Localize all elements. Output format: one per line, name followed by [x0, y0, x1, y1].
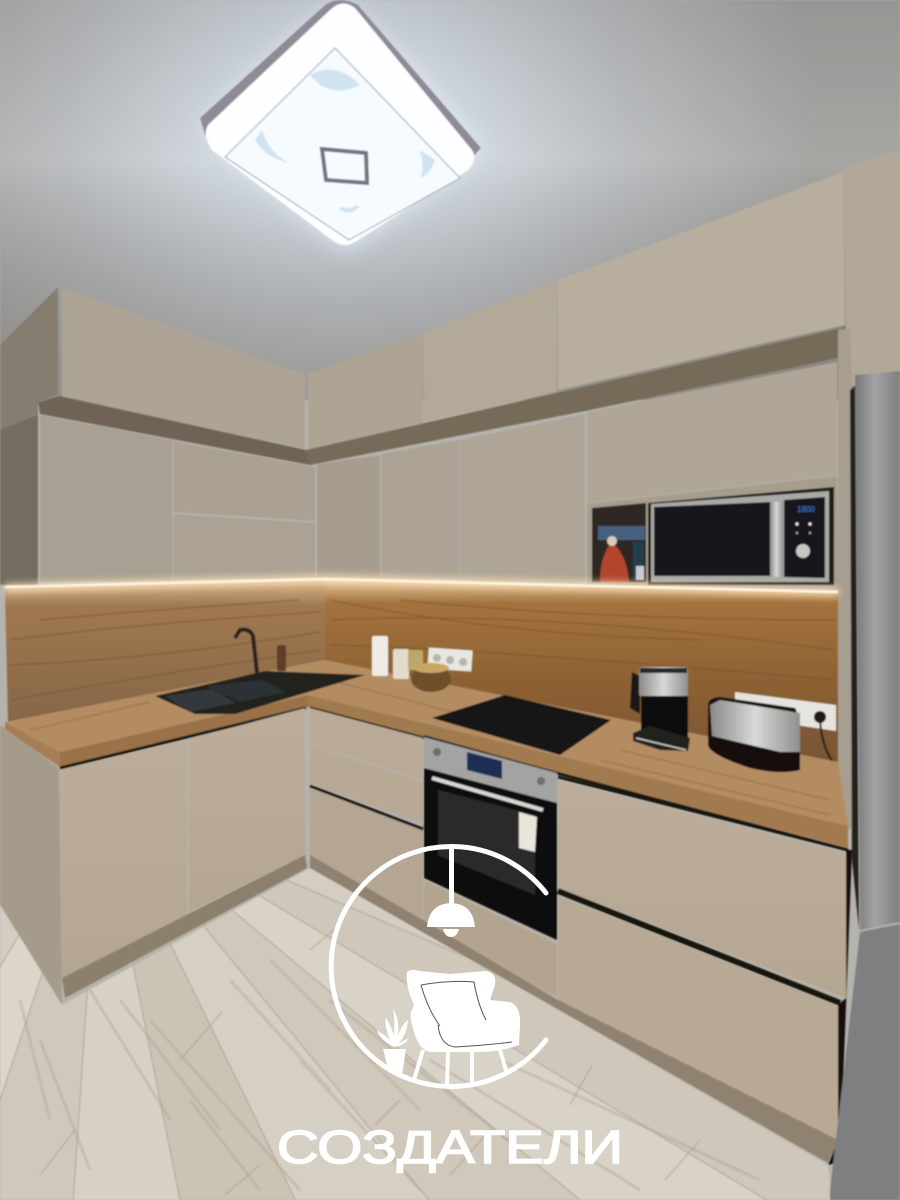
jars and basket [393, 649, 451, 692]
logo: lamp and armchair in open circle [277, 846, 623, 1173]
kettle [630, 667, 690, 751]
upper cabinets left [0, 287, 305, 449]
brand name: СОЗДАТЕЛИ [277, 1121, 623, 1173]
backsplash right [325, 580, 838, 770]
niche figurine [598, 526, 645, 582]
soap dispenser [277, 645, 286, 671]
dark gap right [828, 850, 852, 1165]
fridge [830, 371, 900, 1200]
oven [424, 735, 557, 940]
pendant lamp [427, 846, 475, 937]
floor planks [0, 937, 294, 1200]
faucet [235, 630, 257, 673]
floor grain [20, 960, 760, 1190]
middle cabinets left [40, 415, 315, 582]
left wall strip [0, 415, 38, 585]
microwave [651, 491, 829, 582]
lower cabinets right [558, 777, 848, 1142]
wood grain [10, 600, 835, 700]
ceiling lamp [200, 0, 481, 245]
ceiling [0, 0, 900, 400]
induction hob [432, 695, 611, 755]
floor [0, 868, 831, 1200]
floor joints [0, 880, 767, 1200]
toaster [708, 697, 800, 772]
ceiling lamp glow [205, 0, 480, 250]
counter top [5, 660, 848, 850]
sink [155, 671, 365, 714]
backsplash left [5, 580, 325, 722]
toe kick right [310, 855, 838, 1163]
microwave: 1800 [797, 505, 815, 514]
potted plant [377, 1008, 409, 1075]
paper towel roll [372, 636, 388, 676]
upper cabinets right [308, 172, 845, 450]
lower cabinets middle [310, 708, 557, 997]
lower cabinets left [0, 708, 307, 1005]
logo ring [331, 846, 546, 1086]
microwave niche [587, 476, 838, 590]
led strip glow [5, 579, 838, 592]
soffit shelves [38, 327, 846, 465]
right side column [838, 328, 852, 830]
armchair [407, 970, 520, 1085]
tall right wall panel [838, 150, 900, 386]
middle cabinets right [317, 362, 837, 583]
plug sockets on backsplash [427, 647, 836, 766]
